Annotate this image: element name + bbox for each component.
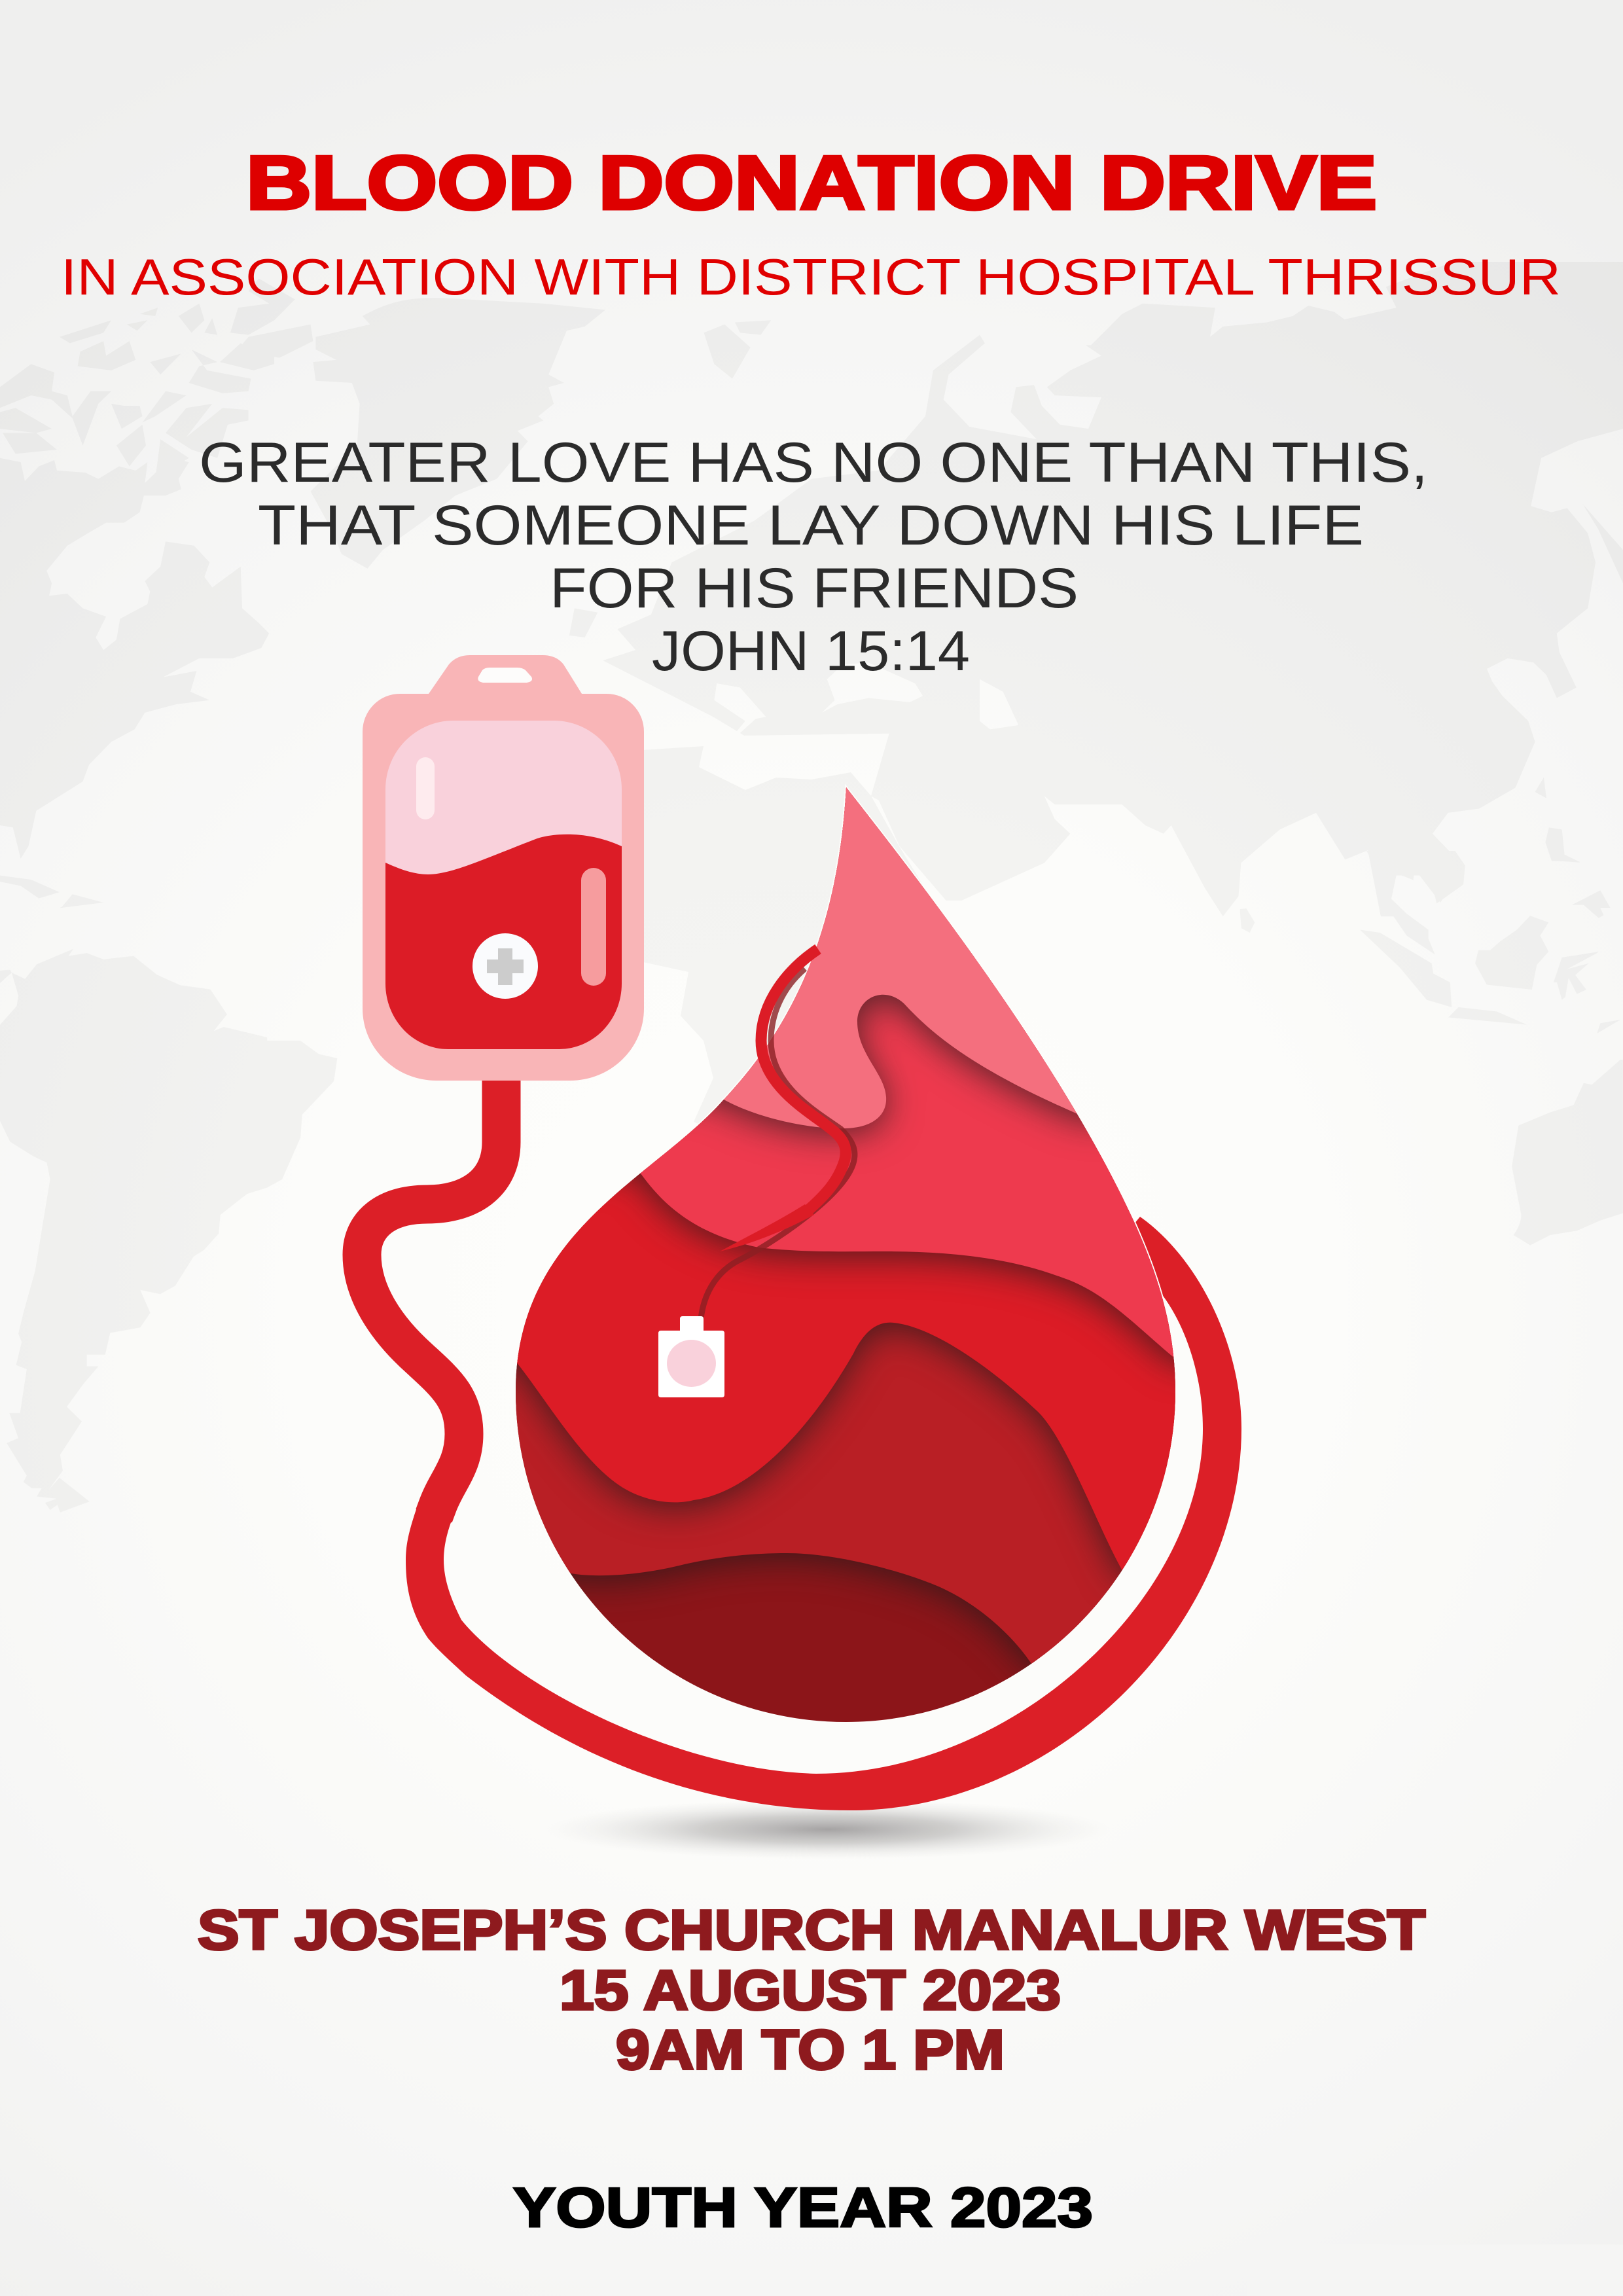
drop layers: [458, 720, 1243, 1767]
bag interior: [385, 721, 622, 1049]
tube ring around drop: [406, 1217, 1241, 1810]
bag highlight left: [416, 757, 435, 819]
quote line 3: FOR HIS FRIENDS: [550, 557, 1079, 620]
map: eurasia: [603, 262, 1623, 916]
layer red: [458, 720, 1243, 1574]
venue: ST JOSEPH’S CHURCH MANALUR WEST: [198, 1899, 1425, 1962]
quote line 2: THAT SOMEONE LAY DOWN HIS LIFE: [258, 494, 1364, 557]
footer: YOUTH YEAR 2023: [513, 2177, 1093, 2239]
hanger hole: [478, 668, 532, 683]
blood bag: [363, 655, 644, 1081]
world map: [0, 262, 1623, 1513]
map: south east asia and australia: [1240, 851, 1623, 1246]
tube red: [761, 949, 846, 1210]
time: 9AM TO 1 PM: [616, 2019, 1005, 2081]
map: north america and arctic: [0, 279, 771, 908]
blood tube: [362, 1049, 1241, 1810]
drop halo: [516, 787, 1175, 1722]
medical cross badge: [473, 933, 538, 999]
tube connector: [658, 1316, 724, 1397]
tube red taper: [720, 1204, 814, 1251]
bag body: [363, 655, 644, 1081]
event details: [198, 1899, 1425, 2081]
layer pink tip: [458, 720, 1243, 1128]
quote line 1: GREATER LOVE HAS NO ONE THAN THIS,: [199, 431, 1428, 494]
tube upper section: [362, 1049, 501, 1516]
thin tube and connector: [658, 949, 855, 1397]
subtitle: IN ASSOCIATION WITH DISTRICT HOSPITAL THRISSUR: [61, 248, 1561, 306]
blood drop: [516, 784, 1175, 1722]
map: south america: [0, 949, 337, 1513]
title: BLOOD DONATION DRIVE: [246, 140, 1377, 225]
tube shadow: [701, 969, 855, 1319]
scripture quote: [199, 431, 1428, 683]
blood in bag: [385, 834, 622, 1049]
layer dark red: [458, 720, 1243, 1668]
ground shadow: [546, 1799, 1109, 1859]
map: africa: [644, 746, 921, 1123]
quote line 4: JOHN 15:14: [652, 620, 970, 683]
layer bright red: [458, 720, 1243, 1359]
date: 15 AUGUST 2023: [560, 1960, 1061, 2022]
layer darkest base: [458, 753, 1243, 1767]
bag highlight right: [581, 868, 606, 986]
